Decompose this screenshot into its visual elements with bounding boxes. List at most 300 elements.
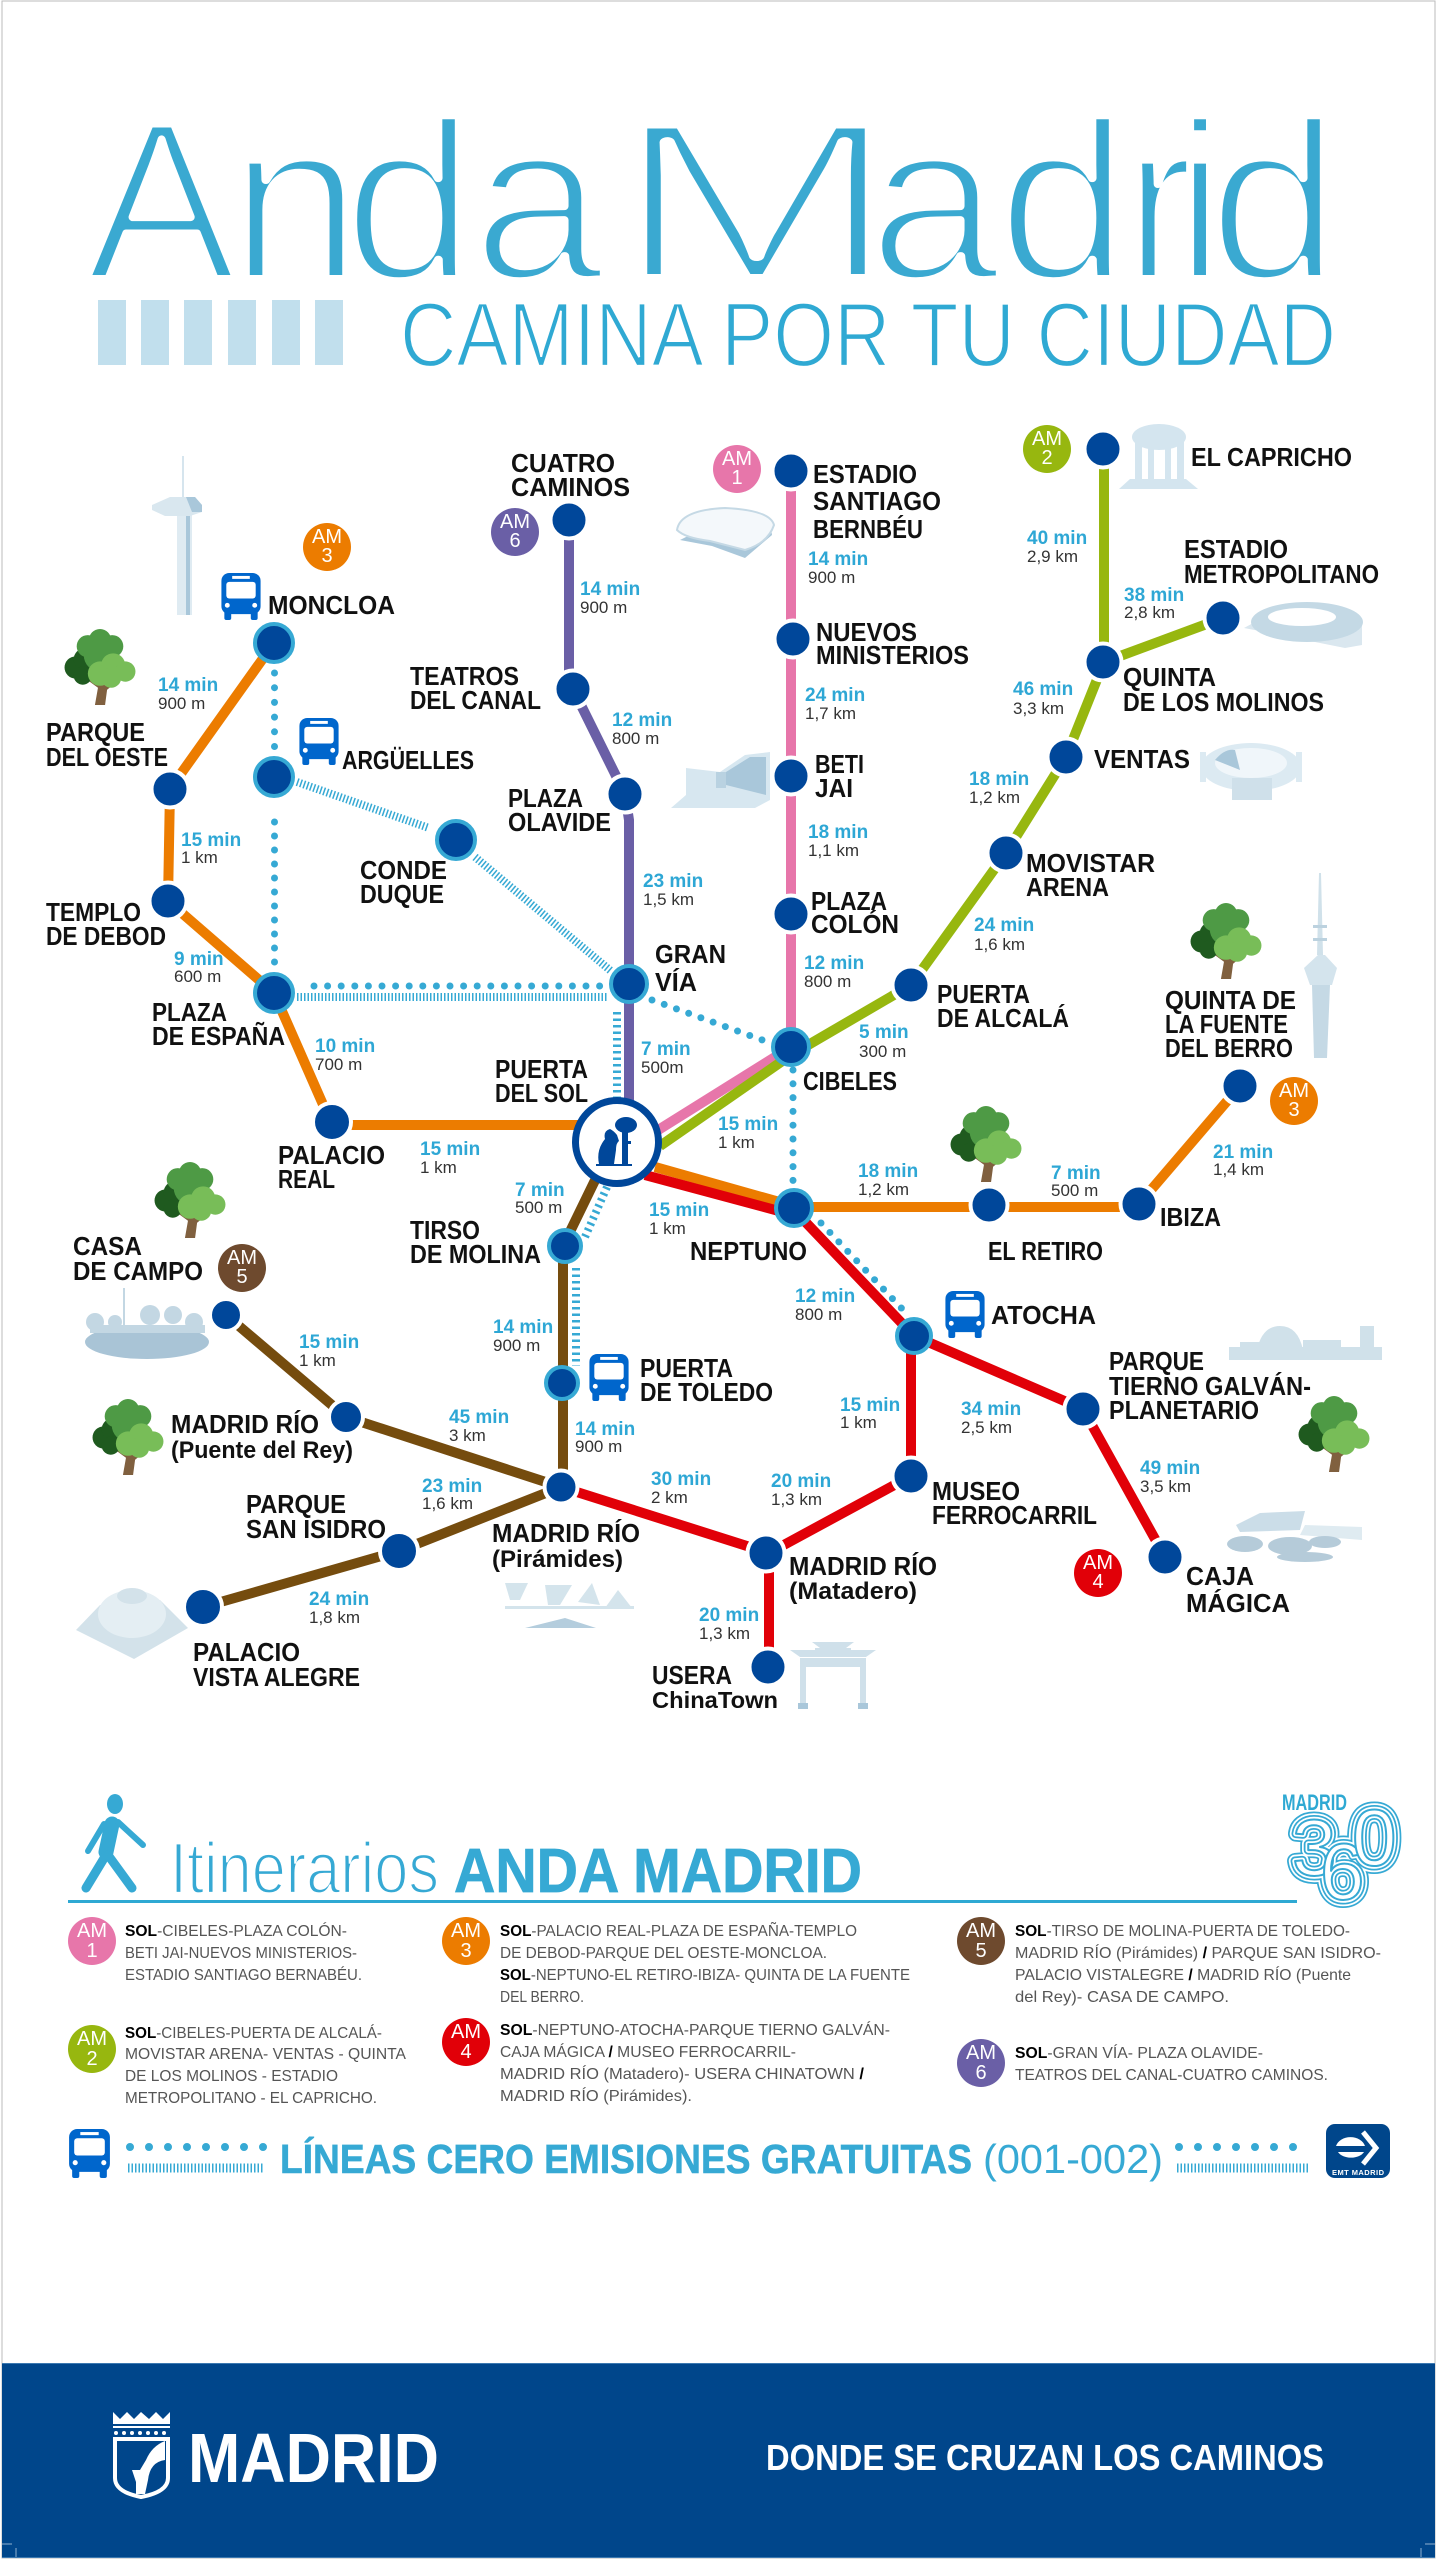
leg: 7 min 500 m Ibiza: 500 m bbox=[1051, 1181, 1098, 1200]
icon: Las Ventas bbox=[1200, 743, 1302, 800]
leg: 14 min 900 m Bernabéu: 900 m bbox=[808, 568, 855, 587]
icon: tree El Retiro bbox=[951, 1106, 1021, 1182]
leg: 12 min 800 m Colón bbox=[804, 953, 864, 991]
metro map bbox=[46, 424, 1382, 1713]
legend item AM2 bbox=[68, 2023, 406, 2107]
leg: 15 min 1 km Oeste: 1 km bbox=[181, 848, 218, 867]
leg: 21 min 1,4 km: 21 min bbox=[1213, 1142, 1273, 1163]
leg: 9 min 600 m: 600 m bbox=[174, 967, 221, 986]
leg: 24 min 1,6 km bbox=[974, 915, 1034, 954]
label: Plaza Colón: PLAZA bbox=[811, 886, 887, 916]
leg: 18 min 1,1 km: 1,1 km bbox=[808, 841, 859, 860]
title: r bbox=[1123, 74, 1198, 327]
logo text: Madrid: MADRID bbox=[188, 2419, 439, 2497]
badge AM5: 5 bbox=[236, 1266, 248, 1288]
icon: Casa de Campo lake bbox=[85, 1288, 209, 1359]
icon: Beti Jai bbox=[671, 752, 770, 808]
badge AM2: 2 bbox=[1041, 447, 1053, 469]
leg: 18 min 1,2 km Retiro: 1,2 km bbox=[858, 1180, 909, 1199]
icon: Madrid Río Pirámides bridge bbox=[505, 1583, 634, 1628]
legend item AM3: DE DEBOD-PARQUE DEL OESTE-MONCLOA. bbox=[500, 1945, 827, 1962]
leg: 15 min 1 km Cibeles: 1 km bbox=[718, 1133, 755, 1152]
label: Moncloa: MONCLOA bbox=[268, 590, 395, 620]
leg: 15 min 1 km Neptuno bbox=[649, 1200, 709, 1238]
leg: 10 min 700 m bbox=[315, 1036, 375, 1074]
legend item AM1: AM bbox=[77, 1920, 107, 1942]
leg: 15 min 1 km Cibeles bbox=[718, 1114, 778, 1152]
label: Quinta de los Molinos: DE LOS MOLINOS bbox=[1123, 687, 1324, 717]
label: Quinta de la Fuente del Berro: LA FUENTE bbox=[1165, 1009, 1288, 1039]
leg: 12 min 800 m Olavide: 800 m bbox=[612, 729, 659, 748]
title: i bbox=[1175, 74, 1225, 327]
leg: 9 min 600 m: 9 min bbox=[174, 949, 224, 970]
leg: 45 min 3 km bbox=[449, 1407, 509, 1445]
label: Parque Tierno Galván Planetario: PLANETARIO bbox=[1109, 1395, 1259, 1425]
icon: tree Parque del Oeste bbox=[65, 629, 135, 705]
legend item AM4: AM bbox=[451, 2021, 481, 2043]
label: Cuatro Caminos: CAMINOS bbox=[511, 472, 630, 502]
legend item AM2: SOL-CIBELES-PUERTA DE ALCALÁ- bbox=[125, 2023, 382, 2042]
label: El Retiro: EL RETIRO bbox=[988, 1236, 1103, 1266]
legend item AM4: MADRID RÍO (Pirámides). bbox=[500, 2086, 692, 2105]
leg: 20 min 1,3 km Usera: 20 min bbox=[699, 1605, 759, 1626]
label: Museo Ferrocarril: FERROCARRIL bbox=[932, 1500, 1097, 1530]
interchange stations bbox=[255, 624, 931, 1399]
leg: 18 min 1,2 km Ventas bbox=[969, 769, 1029, 807]
leg: 18 min 1,2 km Retiro bbox=[858, 1161, 918, 1199]
leg: 5 min 300 m bbox=[859, 1022, 909, 1061]
leg: 15 min 1 km Museo bbox=[840, 1395, 900, 1432]
label: Palacio Vista Alegre: PALACIO bbox=[193, 1637, 300, 1667]
label: Parque San Isidro: PARQUE bbox=[246, 1489, 346, 1519]
station labels bbox=[46, 442, 1379, 1713]
icon: Planetario bbox=[1229, 1326, 1382, 1360]
legend item AM4: CAJA MÁGICA / MUSEO FERROCARRIL- bbox=[500, 2042, 796, 2061]
title: d bbox=[343, 74, 475, 327]
leg: 45 min 3 km: 45 min bbox=[449, 1407, 509, 1428]
label: Madrid Río Matadero: (Matadero) bbox=[789, 1578, 917, 1605]
logo: Madrid 360: 360 bbox=[1292, 1793, 1396, 1916]
title: d bbox=[1208, 74, 1340, 327]
badge AM6: AM bbox=[500, 511, 530, 533]
logo: Madrid 360: 360 bbox=[1292, 1793, 1396, 1916]
leg: 5 min 300 m: 300 m bbox=[859, 1042, 906, 1061]
leg: 14 min 900 m Pirámides bbox=[575, 1419, 635, 1456]
badge AM3 east: 3 bbox=[1288, 1099, 1300, 1121]
leg: 14 min 900 m Toledo: 14 min bbox=[493, 1317, 553, 1338]
badge AM6 bbox=[491, 508, 539, 556]
label: Plaza Olavide: OLAVIDE bbox=[508, 807, 611, 837]
label: Casa de Campo: CASA bbox=[73, 1231, 142, 1261]
logo: Madrid 360: 360 bbox=[1292, 1793, 1396, 1916]
title: a bbox=[868, 74, 1000, 327]
leg: 14 min 900 m Moncloa: 14 min bbox=[158, 675, 218, 696]
bus route hatch bbox=[297, 782, 617, 1366]
bus icons bbox=[221, 573, 985, 1401]
badge AM4 bbox=[1074, 1549, 1122, 1597]
icon: Palacio Vista Alegre bbox=[76, 1588, 188, 1659]
bus route dots bbox=[274, 673, 906, 1313]
legend item AM4: MADRID RÍO (Matadero)- USERA CHINATOWN / bbox=[500, 2064, 865, 2083]
leg: 24 min 1,8 km: 24 min bbox=[309, 1589, 369, 1610]
icon: tree Tierno Galván bbox=[1299, 1396, 1369, 1472]
leg: 7 min 500m: 500m bbox=[641, 1058, 684, 1077]
label: Usera ChinaTown: USERA bbox=[652, 1660, 732, 1690]
leg: 7 min 500 m Ibiza bbox=[1051, 1163, 1101, 1200]
label: Gran Vía: VÍA bbox=[655, 967, 697, 997]
leg: 7 min 500 m Tirso: 500 m bbox=[515, 1198, 562, 1217]
label: Quinta de la Fuente del Berro: DEL BERRO bbox=[1165, 1033, 1293, 1063]
legend item AM5: 5 bbox=[975, 1940, 987, 1962]
leg: 7 min 500m bbox=[641, 1039, 691, 1077]
legend item AM1: SOL-CIBELES-PLAZA COLÓN- bbox=[125, 1921, 347, 1940]
leg: 49 min 3,5 km: 49 min bbox=[1140, 1458, 1200, 1479]
label: Madrid Río Puente del Rey: MADRID RÍO bbox=[171, 1409, 319, 1439]
label: Cuatro Caminos: CUATRO bbox=[511, 448, 615, 478]
label: Palacio Vista Alegre: VISTA ALEGRE bbox=[193, 1662, 360, 1692]
leg: 15 min 1 km Palacio Real: 1 km bbox=[420, 1158, 457, 1177]
label: Ibiza: IBIZA bbox=[1160, 1202, 1221, 1232]
leg: 12 min 800 m Atocha: 12 min bbox=[795, 1286, 855, 1307]
leg: 14 min 900 m Cuatro Caminos: 14 min bbox=[580, 579, 640, 600]
label: Neptuno: NEPTUNO bbox=[690, 1236, 807, 1266]
badge AM3: AM bbox=[312, 526, 342, 548]
leg: 24 min 1,7 km: 1,7 km bbox=[805, 704, 856, 723]
leg: 18 min 1,2 km Ventas: 18 min bbox=[969, 769, 1029, 790]
badge AM3: 3 bbox=[321, 545, 333, 567]
leg: 34 min 2,5 km bbox=[961, 1399, 1021, 1437]
leg: 20 min 1,3 km Matadero bbox=[771, 1471, 831, 1509]
logo: EMT Madrid bbox=[1326, 2124, 1390, 2178]
title: a bbox=[472, 74, 604, 327]
leg: 15 min 1 km Neptuno: 15 min bbox=[649, 1200, 709, 1221]
leg: 18 min 1,2 km Ventas: 1,2 km bbox=[969, 788, 1020, 807]
leg: 40 min 2,9 km: 2,9 km bbox=[1027, 547, 1078, 566]
icon: Estadio Metropolitano bbox=[1244, 602, 1363, 648]
label: Gran Vía: GRAN bbox=[655, 939, 726, 969]
line AM5 brown bbox=[203, 1170, 600, 1607]
icon: tree Madrid Río Puente del Rey bbox=[93, 1399, 163, 1475]
badge AM3 east: AM bbox=[1279, 1080, 1309, 1102]
label: Parque del Oeste: DEL OESTE bbox=[46, 742, 168, 772]
leg: 9 min 600 m bbox=[174, 949, 224, 986]
leg: 23 min 1,6 km: 23 min bbox=[422, 1476, 482, 1497]
leg: 23 min 1,6 km bbox=[422, 1476, 482, 1513]
label: Madrid Río Pirámides: MADRID RÍO bbox=[492, 1518, 640, 1548]
leg: 49 min 3,5 km bbox=[1140, 1458, 1200, 1496]
leg: 15 min 1 km Museo: 15 min bbox=[840, 1395, 900, 1416]
label: Templo de Debod: TEMPLO bbox=[46, 897, 141, 927]
leg: 14 min 900 m Cuatro Caminos: 900 m bbox=[580, 598, 627, 617]
leg: 24 min 1,8 km: 1,8 km bbox=[309, 1608, 360, 1627]
leg: 24 min 1,6 km: 24 min bbox=[974, 915, 1034, 936]
line AM2 green bbox=[660, 449, 1223, 1146]
icon: bus bbox=[69, 2129, 110, 2178]
icon: tree Casa de Campo bbox=[155, 1162, 225, 1238]
heading: Itinerarios Anda Madrid: Itinerarios bbox=[170, 1829, 439, 1909]
label: Nuevos Ministerios: NUEVOS bbox=[816, 617, 917, 647]
leg: 7 min 500m: 7 min bbox=[641, 1039, 691, 1060]
leg: 7 min 500 m Ibiza: 7 min bbox=[1051, 1163, 1101, 1184]
label: Puerta del Sol: PUERTA bbox=[495, 1054, 588, 1084]
label: Parque San Isidro: SAN ISIDRO bbox=[246, 1514, 386, 1544]
label: Madrid Río Matadero: MADRID RÍO bbox=[789, 1551, 937, 1581]
line AM6 purple bbox=[569, 520, 629, 1105]
label: Movistar Arena: MOVISTAR bbox=[1026, 848, 1155, 878]
icon: bus Puerta de Toledo bbox=[589, 1354, 629, 1401]
badge AM1: AM bbox=[722, 448, 752, 470]
icon: walking person bbox=[86, 1794, 143, 1888]
label: Teatros del Canal: DEL CANAL bbox=[410, 685, 541, 715]
crop marks bbox=[2, 2364, 1435, 2558]
label: Palacio Real: REAL bbox=[278, 1164, 335, 1194]
leg: 14 min 900 m Toledo: 900 m bbox=[493, 1336, 540, 1355]
icon: bus Argüelles bbox=[299, 718, 339, 765]
label: Cibeles: CIBELES bbox=[803, 1066, 897, 1096]
legend item AM4 bbox=[442, 2018, 890, 2105]
label: Estadio Santiago Bernabéu: BERNBÉU bbox=[813, 514, 923, 544]
leg: 38 min 2,8 km: 38 min bbox=[1124, 585, 1184, 606]
label: Caja Mágica: CAJA bbox=[1186, 1561, 1254, 1591]
legend item AM2: 2 bbox=[86, 2048, 98, 2070]
badge AM6: 6 bbox=[509, 530, 521, 552]
label: Puerta del Sol: DEL SOL bbox=[495, 1078, 588, 1108]
leg: 14 min 900 m Bernabéu: 14 min bbox=[808, 549, 868, 570]
leg: 14 min 900 m Moncloa bbox=[158, 675, 218, 713]
label: Beti Jai: BETI bbox=[815, 749, 864, 779]
badge AM1 bbox=[713, 445, 761, 493]
leg: 46 min 3,3 km bbox=[1013, 679, 1073, 718]
legend item AM6: SOL-GRAN VÍA- PLAZA OLAVIDE- bbox=[1015, 2043, 1263, 2062]
badge AM5: AM bbox=[227, 1247, 257, 1269]
logo: Madrid 360: 360 bbox=[1292, 1793, 1396, 1916]
legend item AM6 bbox=[957, 2039, 1328, 2087]
legend item AM3: DEL BERRO. bbox=[500, 1989, 584, 2006]
icon: Puerta del Sol hub with bear and madroño bbox=[576, 1100, 658, 1184]
label: Caja Mágica: MÁGICA bbox=[1186, 1588, 1290, 1618]
label: Plaza de España: PLAZA bbox=[152, 997, 227, 1027]
leg: 18 min 1,1 km: 18 min bbox=[808, 822, 868, 843]
leg: 24 min 1,7 km bbox=[805, 685, 865, 723]
label: Plaza de España: DE ESPAÑA bbox=[152, 1021, 285, 1051]
leg: 12 min 800 m Olavide bbox=[612, 710, 672, 748]
leg: 45 min 3 km: 3 km bbox=[449, 1426, 486, 1445]
decorative bars bbox=[98, 300, 343, 365]
leg: 21 min 1,4 km: 1,4 km bbox=[1213, 1160, 1264, 1179]
icon: tree Quinta de la Fuente del Berro bbox=[1191, 903, 1261, 979]
label: Puerta de Toledo: DE TOLEDO bbox=[640, 1377, 773, 1407]
logo: Madrid coat of arms bbox=[113, 2412, 170, 2497]
legend item AM1: 1 bbox=[86, 1940, 98, 1962]
legend item AM5: MADRID RÍO (Pirámides) / PARQUE SAN ISIDRO- bbox=[1015, 1943, 1381, 1962]
slogan: DONDE SE CRUZAN LOS CAMINOS bbox=[766, 2437, 1324, 2478]
leg: 15 min 1 km Oeste bbox=[181, 830, 241, 867]
title: d bbox=[997, 74, 1129, 327]
footer band bbox=[2, 2363, 1435, 2558]
label: Tirso de Molina: TIRSO bbox=[410, 1215, 480, 1245]
leg: 12 min 800 m Atocha: 800 m bbox=[795, 1305, 842, 1324]
icon: Estadio Santiago Bernabéu bbox=[677, 508, 774, 558]
leg: 15 min 1 km Casa de Campo bbox=[299, 1332, 359, 1370]
leg: 7 min 500 m Tirso: 7 min bbox=[515, 1180, 565, 1201]
leg: 15 min 1 km Museo: 1 km bbox=[840, 1413, 877, 1432]
heading: Itinerarios Anda Madrid bbox=[170, 1829, 862, 1909]
leg: 34 min 2,5 km: 2,5 km bbox=[961, 1418, 1012, 1437]
leg: 12 min 800 m Atocha bbox=[795, 1286, 855, 1324]
legend item AM5: SOL-TIRSO DE MOLINA-PUERTA DE TOLEDO- bbox=[1015, 1923, 1350, 1940]
leg: 14 min 900 m Pirámides: 900 m bbox=[575, 1437, 622, 1456]
label: El Capricho: EL CAPRICHO bbox=[1191, 442, 1352, 472]
leg: 15 min 1 km Palacio Real bbox=[420, 1139, 480, 1177]
leg: 21 min 1,4 km bbox=[1213, 1142, 1273, 1179]
legend item AM2: DE LOS MOLINOS - ESTADIO bbox=[125, 2068, 338, 2085]
dotted pattern right bbox=[1177, 2147, 1312, 2168]
label: Estadio Metropolitano: ESTADIO bbox=[1184, 534, 1288, 564]
label: Argüelles: ARGÜELLES bbox=[342, 745, 474, 775]
leg: 46 min 3,3 km: 3,3 km bbox=[1013, 699, 1064, 718]
legend item AM3: SOL-PALACIO REAL-PLAZA DE ESPAÑA-TEMPLO bbox=[500, 1920, 857, 1940]
heading rule bbox=[68, 1900, 1297, 1903]
leg: 30 min 2 km bbox=[651, 1469, 711, 1507]
label: Conde Duque: DUQUE bbox=[360, 879, 444, 909]
badge AM2 bbox=[1023, 425, 1071, 473]
leg times and distances bbox=[158, 528, 1273, 1643]
leg: 30 min 2 km: 30 min bbox=[651, 1469, 711, 1490]
label: Beti Jai: JAI bbox=[815, 773, 853, 803]
label: Teatros del Canal: TEATROS bbox=[410, 661, 519, 691]
tree icons bbox=[65, 629, 1369, 1475]
landmark illustrations bbox=[76, 424, 1382, 1709]
leg: 14 min 900 m Pirámides: 14 min bbox=[575, 1419, 635, 1440]
label: Estadio Metropolitano: METROPOLITANO bbox=[1184, 559, 1379, 589]
leg: 14 min 900 m Toledo bbox=[493, 1317, 553, 1355]
leg: 38 min 2,8 km bbox=[1124, 585, 1184, 622]
leg: 15 min 1 km Casa de Campo: 1 km bbox=[299, 1351, 336, 1370]
leg: 12 min 800 m Colón: 800 m bbox=[804, 972, 851, 991]
leg: 46 min 3,3 km: 46 min bbox=[1013, 679, 1073, 700]
logo: Madrid 360: 360 bbox=[1292, 1793, 1396, 1916]
leg: 10 min 700 m: 10 min bbox=[315, 1036, 375, 1057]
icon: China Town gate bbox=[790, 1642, 876, 1709]
legend item AM5: AM bbox=[966, 1920, 996, 1942]
logo: Madrid 360: MADRID bbox=[1282, 1790, 1347, 1815]
badge AM1: 1 bbox=[731, 467, 743, 489]
label: Atocha: ATOCHA bbox=[991, 1300, 1096, 1330]
legend item AM4: SOL-NEPTUNO-ATOCHA-PARQUE TIERNO GALVÁN- bbox=[500, 2020, 890, 2039]
badge AM3 east bbox=[1270, 1077, 1318, 1125]
logo: EMT Madrid: EMT MADRID bbox=[1332, 2168, 1385, 2177]
label: Templo de Debod: DE DEBOD bbox=[46, 921, 166, 951]
title: A bbox=[86, 74, 237, 327]
label: Palacio Real: PALACIO bbox=[278, 1140, 385, 1170]
label: Usera ChinaTown: ChinaTown bbox=[652, 1687, 778, 1713]
banner: zero emission lines bbox=[69, 2124, 1390, 2182]
label: Estadio Santiago Bernabéu: SANTIAGO bbox=[813, 486, 941, 516]
leg: 24 min 1,7 km: 24 min bbox=[805, 685, 865, 706]
leg: 23 min 1,5 km: 23 min bbox=[643, 871, 703, 892]
leg: 15 min 1 km Oeste: 15 min bbox=[181, 830, 241, 851]
leg: 18 min 1,2 km Retiro: 18 min bbox=[858, 1161, 918, 1182]
legend item AM6: AM bbox=[966, 2042, 996, 2064]
label: Puerta de Alcalá: DE ALCALÁ bbox=[937, 1003, 1069, 1033]
label: Nuevos Ministerios: MINISTERIOS bbox=[816, 640, 969, 670]
label: Casa de Campo: DE CAMPO bbox=[73, 1256, 203, 1286]
leg: 14 min 900 m Cuatro Caminos bbox=[580, 579, 640, 617]
label: Plaza Olavide: PLAZA bbox=[508, 783, 583, 813]
leg: 23 min 1,6 km: 1,6 km bbox=[422, 1494, 473, 1513]
leg: 49 min 3,5 km: 3,5 km bbox=[1140, 1477, 1191, 1496]
icon: bus Moncloa bbox=[221, 573, 261, 620]
legend item AM3: AM bbox=[451, 1920, 481, 1942]
heading: Itinerarios Anda Madrid: ANDA MADRID bbox=[454, 1837, 862, 1906]
title: n bbox=[229, 74, 362, 327]
badge AM4: AM bbox=[1083, 1552, 1113, 1574]
label: Madrid Río Puente del Rey: (Puente del Rey) bbox=[171, 1437, 353, 1464]
legend item AM4: 4 bbox=[460, 2041, 472, 2063]
leg: 20 min 1,3 km Matadero: 1,3 km bbox=[771, 1490, 822, 1509]
leg: 38 min 2,8 km: 2,8 km bbox=[1124, 603, 1175, 622]
label: Quinta de la Fuente del Berro: QUINTA DE bbox=[1165, 985, 1296, 1015]
icon: bus Atocha bbox=[945, 1291, 985, 1338]
label: Tirso de Molina: DE MOLINA bbox=[410, 1239, 541, 1269]
legend item AM3 bbox=[442, 1917, 910, 2006]
label: Museo Ferrocarril: MUSEO bbox=[932, 1476, 1020, 1506]
legend: itineraries bbox=[68, 1917, 1381, 2107]
leg: 30 min 2 km: 2 km bbox=[651, 1488, 688, 1507]
icon: El Capricho bbox=[1119, 424, 1198, 489]
AM route badges bbox=[218, 425, 1318, 1597]
line AM4 red bbox=[561, 1175, 1165, 1667]
legend item AM1: BETI JAI-NUEVOS MINISTERIOS- bbox=[125, 1945, 357, 1962]
line AM1 pink bbox=[655, 471, 791, 1132]
legend item AM3: 3 bbox=[460, 1940, 472, 1962]
line AM3 orange bbox=[168, 643, 1240, 1207]
leg: 34 min 2,5 km: 34 min bbox=[961, 1399, 1021, 1420]
legend item AM5 bbox=[957, 1917, 1381, 2006]
badge AM2: AM bbox=[1032, 428, 1062, 450]
leg: 40 min 2,9 km bbox=[1027, 528, 1087, 566]
leg: 12 min 800 m Colón: 12 min bbox=[804, 953, 864, 974]
leg: 24 min 1,8 km bbox=[309, 1589, 369, 1627]
banner text: LÍNEAS CERO EMISIONES GRATUITAS bbox=[280, 2136, 972, 2182]
dotted pattern left bbox=[128, 2147, 266, 2168]
badge AM3 bbox=[303, 523, 351, 571]
leg: 10 min 700 m: 700 m bbox=[315, 1055, 362, 1074]
leg: 12 min 800 m Olavide: 12 min bbox=[612, 710, 672, 731]
leg: 15 min 1 km Neptuno: 1 km bbox=[649, 1219, 686, 1238]
label: Puerta de Toledo: PUERTA bbox=[640, 1353, 733, 1383]
leg: 20 min 1,3 km Usera bbox=[699, 1605, 759, 1643]
label: Parque del Oeste: PARQUE bbox=[46, 717, 145, 747]
plain stations bbox=[150, 430, 1258, 1686]
label: Parque Tierno Galván Planetario: TIERNO GALVÁN- bbox=[1109, 1371, 1311, 1401]
legend item AM1: ESTADIO SANTIAGO BERNABÉU. bbox=[125, 1965, 362, 1984]
legend item AM2: AM bbox=[77, 2028, 107, 2050]
label: Conde Duque: CONDE bbox=[360, 855, 447, 885]
leg: 15 min 1 km Cibeles: 15 min bbox=[718, 1114, 778, 1135]
leg: 14 min 900 m Bernabéu bbox=[808, 549, 868, 587]
badge AM5 bbox=[218, 1244, 266, 1292]
badge AM4: 4 bbox=[1092, 1571, 1104, 1593]
leg: 20 min 1,3 km Usera: 1,3 km bbox=[699, 1624, 750, 1643]
legend item AM5: del Rey)- CASA DE CAMPO. bbox=[1015, 1989, 1229, 2006]
leg: 18 min 1,1 km bbox=[808, 822, 868, 860]
label: Plaza Colón: COLÓN bbox=[811, 909, 899, 939]
label: Estadio Santiago Bernabéu: ESTADIO bbox=[813, 459, 917, 489]
legend item AM1 bbox=[68, 1917, 362, 1984]
legend item AM6: TEATROS DEL CANAL-CUATRO CAMINOS. bbox=[1015, 2067, 1328, 2084]
label: Movistar Arena: ARENA bbox=[1026, 872, 1109, 902]
